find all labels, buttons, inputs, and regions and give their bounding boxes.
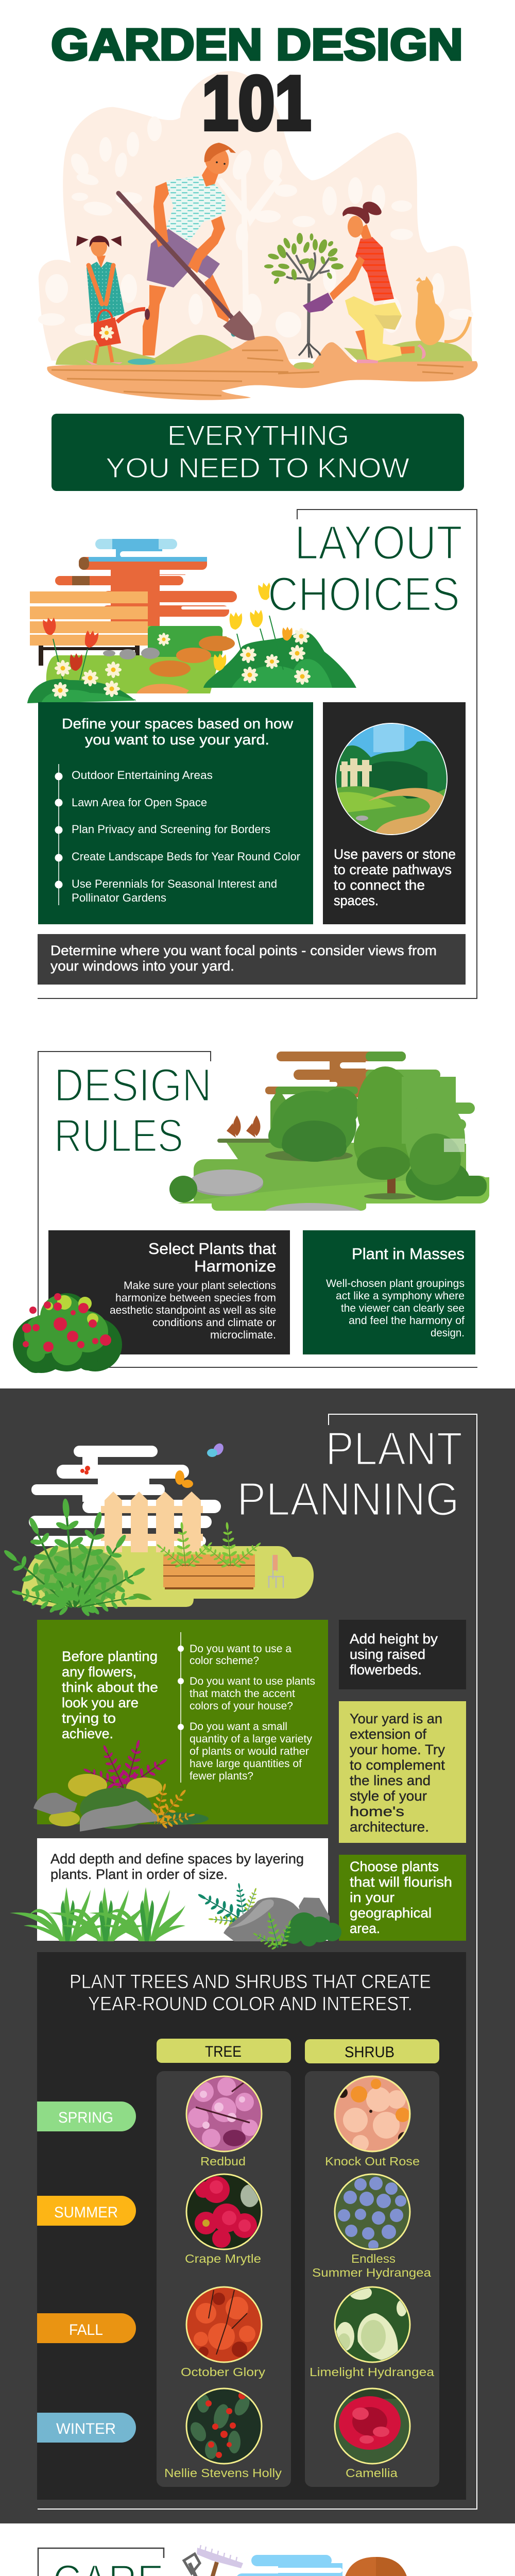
girl with watering can xyxy=(76,236,150,365)
panel: choose plants xyxy=(339,1855,466,1941)
panel: select plants that harmonize: Select Plants that xyxy=(148,1240,276,1258)
panel: define your spaces: Outdoor Entertaining Areas xyxy=(72,769,213,782)
panel: before planting: Before planting xyxy=(62,1649,158,1664)
panel: layering plants: plants. Plant in order of size. xyxy=(50,1867,228,1882)
panel: plant in masses: Plant in Masses xyxy=(352,1245,465,1263)
green hills xyxy=(56,335,472,367)
panel: before planting: of plants or would rather xyxy=(190,1745,309,1757)
panel: add height: using raised xyxy=(350,1647,425,1662)
main title xyxy=(51,20,463,146)
section heading xyxy=(237,1423,462,1526)
column header: shrub xyxy=(305,2039,439,2063)
section: layout choices xyxy=(27,510,477,998)
panel: select plants that harmonize: conditions and climate or xyxy=(152,1317,276,1329)
panel: extension of home: home's xyxy=(350,1804,404,1819)
plant name labels: Redbud xyxy=(200,2155,246,2168)
background blob with pale foliage xyxy=(38,71,473,361)
panel: choose plants: in your xyxy=(350,1890,394,1905)
photo: knock out rose xyxy=(335,2076,412,2154)
section heading xyxy=(54,1060,212,1162)
panel: before planting: think about the xyxy=(62,1680,158,1695)
plant name labels: October Glory xyxy=(181,2365,266,2379)
plant name labels: Limelight Hydrangea xyxy=(310,2365,434,2379)
panel: plant in masses: the viewer can clearly see xyxy=(341,1302,465,1314)
panel: add height xyxy=(339,1620,466,1689)
callout: focal points: Determine where you want focal points - consider views from xyxy=(50,943,437,958)
fence, crate and plants illustration xyxy=(0,1442,314,1620)
callout: focal points xyxy=(38,934,466,985)
panel: select plants that harmonize: harmonize between species from xyxy=(115,1292,276,1304)
photo: camellia xyxy=(335,2388,412,2466)
season tab: summer: SUMMER xyxy=(54,2204,118,2221)
panel: layering plants xyxy=(10,1838,341,1959)
column header: tree: TREE xyxy=(205,2043,242,2060)
panel: before planting: color scheme? xyxy=(190,1655,259,1667)
panel: extension of home: extension of xyxy=(350,1726,427,1742)
main title: GARDEN DESIGN xyxy=(51,20,463,70)
panel: select plants that harmonize: microclimate. xyxy=(210,1329,276,1341)
panel: before planting: achieve. xyxy=(62,1726,113,1741)
panel: choose plants: Choose plants xyxy=(350,1859,439,1874)
panel: define your spaces: Define your spaces based on how xyxy=(62,716,294,732)
photo: endless summer hydrangea xyxy=(335,2174,412,2251)
season tab: spring xyxy=(37,2102,136,2131)
panel: pavers and pathways: to connect the xyxy=(334,877,425,893)
panel: extension of home: your home. Try xyxy=(350,1742,445,1757)
section heading: RULES xyxy=(54,1110,183,1162)
panel: layering plants: Add depth and define spaces by layering xyxy=(50,1851,304,1867)
panel: define your spaces: Lawn Area for Open Space xyxy=(72,796,207,809)
icon: fern, rocks and shrub xyxy=(194,1882,341,1959)
heading: YEAR-ROUND COLOR AND INTEREST. xyxy=(88,1993,413,2015)
plant name labels xyxy=(164,2155,434,2480)
panel: trees and shrubs by season xyxy=(37,1952,466,2500)
heading: PLANT TREES AND SHRUBS THAT CREATE xyxy=(70,1971,431,1993)
subtitle banner: YOU NEED TO KNOW xyxy=(106,452,409,484)
icon: flowering plants and rocks xyxy=(33,1738,209,1832)
season tab: fall: FALL xyxy=(69,2321,103,2338)
column header: shrub: SHRUB xyxy=(345,2044,394,2061)
section: care tips xyxy=(38,2545,487,2576)
icon: rose bush xyxy=(13,1293,122,1373)
young tree with roots xyxy=(264,233,344,358)
panel: extension of home: the lines and xyxy=(350,1773,431,1788)
icon: grass tufts xyxy=(10,1887,185,1941)
season tab: winter xyxy=(37,2413,136,2443)
panel: before planting: have large quantities of xyxy=(190,1758,302,1770)
panel: choose plants: geographical xyxy=(350,1905,432,1921)
plant name labels: Camellia xyxy=(346,2466,398,2480)
section heading: PLANT xyxy=(325,1423,462,1475)
season tab: summer xyxy=(37,2196,136,2226)
panel: extension of home: style of your xyxy=(350,1788,427,1804)
woman planting xyxy=(303,202,426,363)
main title: 101 xyxy=(202,61,311,146)
man with shovel xyxy=(118,143,255,365)
bench and garden illustration xyxy=(27,539,356,703)
subtitle banner xyxy=(52,414,464,491)
panel: before planting: Do you want a small xyxy=(190,1721,287,1733)
panel: define your spaces: you want to use your yard. xyxy=(85,732,269,748)
panel: before planting: trying to xyxy=(62,1710,116,1726)
plant name labels: Crape Mrytle xyxy=(185,2252,261,2265)
section heading: LAYOUT xyxy=(295,516,462,569)
panel: before planting: Do you want to use a xyxy=(190,1643,291,1655)
farmer and garden tools illustration xyxy=(171,2545,487,2576)
panel: select plants that harmonize: Harmonize xyxy=(194,1257,276,1275)
cat xyxy=(416,276,470,345)
soil ground xyxy=(47,336,478,400)
panel: choose plants: that will flourish xyxy=(350,1874,452,1890)
plant name labels: Nellie Stevens Holly xyxy=(164,2466,282,2480)
panel: pavers and pathways: spaces. xyxy=(334,893,379,908)
panel: define your spaces: Plan Privacy and Screening for Borders xyxy=(72,823,270,836)
panel: select plants that harmonize: aesthetic standpoint as well as site xyxy=(110,1304,276,1316)
panel: select plants that harmonize: Make sure your plant selections xyxy=(124,1280,276,1292)
panel: before planting xyxy=(33,1620,328,1832)
panel: add height: flowerbeds. xyxy=(350,1662,422,1677)
panel: extension of home: Your yard is an xyxy=(350,1711,442,1726)
section heading: PLANNING xyxy=(237,1473,459,1526)
subtitle banner: EVERYTHING xyxy=(167,419,349,451)
section heading: DESIGN xyxy=(54,1060,212,1111)
panel: extension of home xyxy=(339,1701,466,1843)
panel: pavers and pathways: to create pathways xyxy=(334,862,452,877)
panel: plant in masses xyxy=(303,1230,475,1354)
panel: select plants that harmonize xyxy=(48,1230,290,1354)
panel: extension of home: architecture. xyxy=(350,1819,429,1835)
panel: add height: Add height by xyxy=(350,1631,438,1647)
plant name labels: Endless xyxy=(351,2252,396,2265)
panel: before planting: fewer plants? xyxy=(190,1770,253,1782)
panel: define your spaces: Use Perennials for Seasonal Interest and xyxy=(72,877,277,890)
photo: october glory xyxy=(185,2287,263,2365)
callout: focal points: your windows into your yard. xyxy=(50,958,234,974)
season tab: winter: WINTER xyxy=(56,2420,116,2437)
photo: redbud xyxy=(185,2076,263,2154)
panel: before planting: that match the accent xyxy=(190,1688,295,1700)
column header: tree xyxy=(157,2039,291,2063)
section: design rules xyxy=(13,1052,489,1373)
panel: define your spaces xyxy=(38,702,313,924)
season tab: spring: SPRING xyxy=(58,2109,113,2126)
panel: plant in masses: Well-chosen plant groupings xyxy=(326,1278,465,1290)
icon: garden path circle xyxy=(335,721,448,840)
section heading xyxy=(268,516,462,621)
hedges and lawn illustration xyxy=(169,1052,489,1211)
heading xyxy=(70,1971,431,2015)
plant name labels: Summer Hydrangea xyxy=(312,2266,431,2279)
panel: define your spaces: Create Landscape Beds for Year Round Color xyxy=(72,850,300,863)
section: plant planning background xyxy=(0,1388,515,2523)
photo: nellie stevens holly xyxy=(185,2388,263,2466)
section heading: CHOICES xyxy=(268,567,460,621)
panel: before planting: quantity of a large variety xyxy=(190,1733,312,1745)
panel: define your spaces: Pollinator Gardens xyxy=(72,891,166,904)
panel: pavers and pathways: Use pavers or stone xyxy=(334,846,456,862)
hero illustration: family gardening xyxy=(38,71,478,400)
panel: plant in masses: design. xyxy=(431,1327,465,1339)
panel: before planting: any flowers, xyxy=(62,1664,136,1680)
panel: plant in masses: and feel the harmony of xyxy=(349,1315,465,1327)
panel: choose plants: area. xyxy=(350,1921,380,1936)
season tab: fall xyxy=(37,2313,136,2343)
photo: crape myrtle xyxy=(185,2174,263,2251)
panel: pavers and pathways xyxy=(323,702,466,924)
panel: extension of home: to complement xyxy=(350,1757,445,1773)
plant name labels: Knock Out Rose xyxy=(325,2155,420,2168)
photo: limelight hydrangea xyxy=(335,2285,412,2365)
panel: before planting: look you are xyxy=(62,1695,139,1710)
panel: plant in masses: act like a symphony where xyxy=(336,1290,465,1302)
panel: before planting: colors of your house? xyxy=(190,1700,293,1712)
panel: before planting: Do you want to use plants xyxy=(190,1675,315,1687)
